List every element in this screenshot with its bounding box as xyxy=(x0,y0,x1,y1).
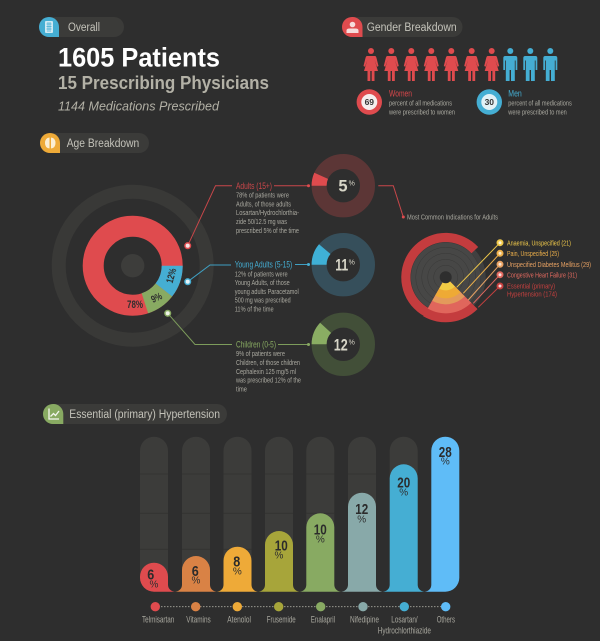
text: children: was prescribed 12% of the xyxy=(235,376,301,384)
men statistic: were prescribed to men xyxy=(508,107,567,116)
bar: Vitamins 6% xyxy=(175,556,217,592)
text: adults xyxy=(236,181,299,235)
bar chart legend: Others xyxy=(437,615,455,626)
bar chart legend: Losartan/ xyxy=(391,615,418,626)
section header: Essential (primary) Hypertension: Essential (primary) Hypertension xyxy=(69,409,220,421)
age donut chart: 12% xyxy=(165,267,179,285)
women statistic: were prescribed to women xyxy=(388,107,455,116)
small donut: adults 5%: 5 xyxy=(338,178,348,196)
bar chart legend: Frusemide xyxy=(267,615,296,626)
text: adults: zide 50/12.5 mg was xyxy=(236,217,287,226)
section header: Essential (primary) Hypertension xyxy=(43,404,227,424)
small donut: adults 5%: % xyxy=(349,180,355,188)
bar chart legend xyxy=(142,602,455,636)
legend: indications for adults: Pain, Unspecified (25) xyxy=(507,249,559,258)
men statistic: 30 xyxy=(485,97,494,107)
bar: Frusemide 10%: % xyxy=(275,551,284,562)
age donut chart: 78% xyxy=(127,299,143,311)
section header: Gender Breakdown xyxy=(342,17,462,37)
bar: Losartan/Hydrochlorthiazide 20% xyxy=(383,464,424,592)
text: adults: Adults, of those adults xyxy=(236,200,291,208)
connector and label: most common indications xyxy=(378,186,498,221)
section header: Age Breakdown: Age Breakdown xyxy=(67,138,139,150)
small donut: adults 5% xyxy=(312,162,367,210)
women statistic: percent of all medications xyxy=(389,98,452,107)
legend: indications for adults: Anaemia, Unspecified (21) xyxy=(507,238,571,247)
legend: indications for adults: Essential (primary) xyxy=(507,282,555,291)
bar chart legend: Atenolol xyxy=(227,615,251,626)
bar chart legend: Vitamins xyxy=(186,615,211,626)
age donut chart: 9% xyxy=(150,291,164,306)
section header: Overall: Overall xyxy=(68,22,100,34)
overall statistics: 1605 Patients xyxy=(58,42,220,72)
text: children xyxy=(235,340,301,394)
bar chart: medications xyxy=(140,437,459,592)
connector and label: most common indications: Most Common Indications for Adults xyxy=(407,212,498,221)
text: children: Children (0-5) xyxy=(236,340,276,350)
bar chart legend: Enalapril xyxy=(311,615,335,626)
bar: Nifedipine 12% xyxy=(341,493,383,592)
men statistic: percent of all medications xyxy=(508,98,572,107)
text: adults: Losartan/Hydrochlorthia- xyxy=(236,208,299,217)
bar chart legend: Telmisartan xyxy=(142,615,174,626)
bar: Atenolol 8%: 8 xyxy=(233,554,240,571)
women statistic: Women xyxy=(389,88,412,98)
small donut: young adults 11%: 11 xyxy=(335,256,348,274)
connector: adults xyxy=(185,184,310,248)
bar: Vitamins 6%: % xyxy=(192,575,201,586)
women statistic xyxy=(357,88,455,116)
text: children: Cephalexin 125 mg/5 ml xyxy=(236,367,296,376)
bar: Losartan/Hydrochlorthiazide 20%: % xyxy=(399,487,408,498)
bar: Vitamins 6%: 6 xyxy=(192,563,199,580)
connector: children xyxy=(165,310,310,346)
age donut chart xyxy=(59,192,207,340)
small donut: children 12%: % xyxy=(349,340,355,346)
bar: Atenolol 8% xyxy=(217,547,258,592)
text: adults: 78% of patients were xyxy=(236,190,289,200)
bar: Telmisartan 6% xyxy=(140,563,175,592)
overall statistics: 15 Prescribing Physicians xyxy=(58,73,269,93)
section header: Gender Breakdown: Gender Breakdown xyxy=(367,22,457,34)
text: children: time xyxy=(236,384,247,394)
section header: Overall xyxy=(39,17,124,37)
text: young adults: Young Adults, of those xyxy=(235,278,290,287)
text: adults: prescribed 5% of the time xyxy=(236,226,299,235)
section header: Age Breakdown xyxy=(40,133,149,153)
bar: Enalapril 10%: 10 xyxy=(314,521,327,538)
bar: Telmisartan 6%: % xyxy=(150,579,159,590)
text: young adults xyxy=(235,260,299,314)
bar tracks xyxy=(140,437,418,592)
women statistic: 69 xyxy=(365,97,374,107)
gender pictogram: women and men xyxy=(364,48,557,81)
text: young adults: Young Adults (5-15) xyxy=(235,260,292,270)
bar chart legend: Hydrochlorthiazide xyxy=(378,625,431,636)
men statistic: Men xyxy=(508,88,522,98)
men statistic xyxy=(477,88,572,116)
overall statistics xyxy=(58,42,269,114)
overall statistics: 1144 Medications Prescribed xyxy=(58,99,220,114)
bar chart legend: Nifedipine xyxy=(350,615,379,626)
bar: Atenolol 8%: % xyxy=(233,566,242,577)
small donut: young adults 11%: % xyxy=(349,260,355,266)
radial chart: indications for adults xyxy=(406,237,486,322)
small donut: children 12% xyxy=(312,320,367,368)
bar: Losartan/Hydrochlorthiazide 20%: 20 xyxy=(397,475,410,492)
bar: Nifedipine 12%: 12 xyxy=(355,501,368,518)
text: young adults: young adults Paracetamol xyxy=(235,287,299,296)
legend: indications for adults: Hypertension (174) xyxy=(507,289,557,298)
text: young adults: 12% of patients were xyxy=(235,270,288,278)
text: young adults: 11% of the time xyxy=(235,304,274,314)
bar: Enalapril 10% xyxy=(300,513,341,592)
legend: indications for adults xyxy=(457,238,591,307)
bar: Others 28%: % xyxy=(441,457,450,468)
bar: Others 28% xyxy=(424,437,459,592)
connector: young adults xyxy=(185,263,310,285)
text: adults: Adults (15+) xyxy=(236,181,272,191)
bar: Enalapril 10%: % xyxy=(316,534,325,545)
bar: Telmisartan 6%: 6 xyxy=(147,566,154,583)
bar: Frusemide 10%: 10 xyxy=(275,538,288,555)
small donut: children 12%: 12 xyxy=(334,336,348,354)
text: children: Children, of those children xyxy=(236,358,300,367)
bar: Nifedipine 12%: % xyxy=(357,514,366,525)
bar: Frusemide 10% xyxy=(258,531,300,592)
bar: Others 28%: 28 xyxy=(439,444,452,461)
small donut: young adults 11% xyxy=(312,241,367,289)
text: children: 9% of patients were xyxy=(236,349,285,358)
text: young adults: 500 mg was prescribed xyxy=(235,296,291,304)
